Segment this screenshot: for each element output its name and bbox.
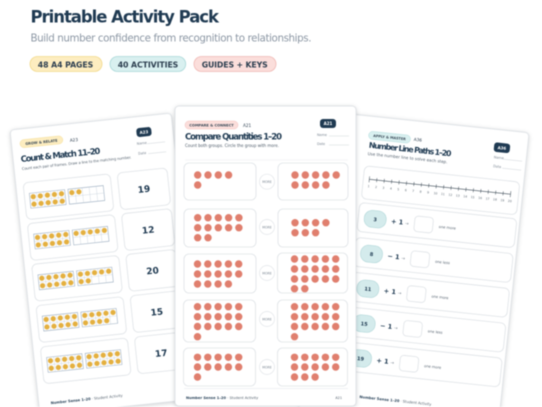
row 3: 14 vs 17 <box>184 253 348 293</box>
step row: 3 plus 1: one more <box>439 225 457 231</box>
step row: 15 minus 1: 15 <box>360 321 368 328</box>
tag: compare and connect <box>185 121 238 129</box>
pill: activities: 40 ACTIVITIES <box>118 60 179 70</box>
worksheet title: Count & Match 11–20 <box>20 146 101 164</box>
date field: Date <box>317 142 325 146</box>
date field <box>138 149 166 156</box>
step row: 3 plus 1: 3 <box>373 217 378 223</box>
step row: 8 minus 1: one less <box>435 260 450 265</box>
number line <box>361 166 520 215</box>
row 5: 11 vs 13: MORE <box>262 365 272 369</box>
dark badge <box>136 127 152 137</box>
dark badge <box>320 119 336 128</box>
step row: 11 plus 1 <box>350 272 510 317</box>
number line: 1 <box>367 184 370 188</box>
row 4: nineteen: 15 <box>150 308 164 319</box>
footer: Number Sense 1–20 · Student Activity <box>186 396 259 400</box>
step row: 11 plus 1: one more <box>431 294 449 300</box>
row 5: twenty: 17 <box>155 349 168 360</box>
number line: 8 <box>419 190 422 194</box>
step row: 15 minus 1: → <box>394 326 398 332</box>
number line: 15 <box>471 195 475 199</box>
code: A23 <box>70 137 79 143</box>
subtitle: Build number confidence from recognition to relationships. <box>30 33 312 45</box>
step row: 19 plus 1: → <box>390 361 394 366</box>
row 2: 12 vs 7: MORE <box>262 225 272 229</box>
step row: 3 plus 1: → <box>405 222 409 227</box>
number line: 17 <box>485 197 490 201</box>
row 3: seventeen: 20 <box>146 266 159 277</box>
step row: 15 minus 1 <box>346 307 506 352</box>
instruction: Count both groups. Circle the group with more. <box>185 143 279 148</box>
row 3: 14 vs 17: MORE <box>262 271 272 275</box>
number line: 7 <box>412 189 414 193</box>
step row: 8 minus 1: 8 <box>369 252 374 258</box>
row 5: twenty <box>40 332 188 384</box>
tag: apply and master: APPLY & MASTER <box>373 134 406 141</box>
step row: 19 plus 1: + 1 <box>376 357 389 366</box>
number line: 5 <box>397 187 400 192</box>
pill: pages: 48 A4 PAGES <box>38 60 94 70</box>
dark badge: A36 <box>497 145 507 151</box>
tag: apply and master <box>368 131 411 143</box>
number line: 18 <box>493 197 497 202</box>
number line: 12 <box>448 193 453 197</box>
pill: activities <box>110 56 186 72</box>
dark badge: A23 <box>139 129 149 135</box>
step row: 11 plus 1: 11 <box>364 286 372 293</box>
date field <box>493 164 521 171</box>
name field <box>317 133 349 137</box>
footer: A21 <box>335 396 342 400</box>
name field: Name <box>494 155 504 160</box>
footer <box>186 396 342 400</box>
number line: 3 <box>382 186 385 190</box>
dark badge <box>493 142 510 153</box>
row 1: twelve: 19 <box>137 185 151 196</box>
pill: guides <box>194 56 276 72</box>
pill: pages <box>30 56 102 72</box>
panel: centre worksheet Compare Quantities <box>175 106 356 406</box>
step row: 19 plus 1 <box>342 342 502 387</box>
footer: Number Sense 1–20 · Student Activity <box>359 395 432 407</box>
step row: 3 plus 1: + 1 <box>391 217 404 227</box>
step row: 11 plus 1: → <box>397 291 402 297</box>
row 4: nineteen <box>36 291 184 343</box>
instruction: Use the number line to solve each step. <box>368 151 448 164</box>
number line: 4 <box>390 187 392 191</box>
name field: Name <box>137 141 147 146</box>
row 5: 11 vs 13 <box>184 348 348 386</box>
row 1: 5 vs 9 <box>184 163 348 200</box>
tag: grow and relate <box>20 136 63 148</box>
number line: 16 <box>478 196 482 200</box>
tag: compare and connect: COMPARE & CONNECT <box>189 124 234 128</box>
code: A21 <box>243 123 252 128</box>
row 2: fifteen <box>27 209 175 261</box>
date field: Date <box>493 164 501 169</box>
tag: grow and relate: GROW & RELATE <box>25 139 58 146</box>
step row: 11 plus 1: + 1 <box>383 287 397 296</box>
row 4: 16 vs 16 <box>184 300 348 342</box>
number line: 19 <box>500 198 505 203</box>
row 1: 5 vs 9: MORE <box>262 180 272 184</box>
step row: 19 plus 1: 19 <box>357 356 365 363</box>
date field <box>317 142 349 146</box>
number line: 11 <box>441 192 445 196</box>
number line: 14 <box>463 194 467 199</box>
row 4: 16 vs 16: MORE <box>262 317 272 321</box>
step row: 3 plus 1 <box>357 202 517 248</box>
worksheet title: Compare Quantities 1–20 <box>185 132 282 142</box>
number line: 10 <box>433 191 438 196</box>
step row: 8 minus 1: − 1 <box>387 252 400 261</box>
row 2: 12 vs 7 <box>184 209 348 247</box>
step row: 8 minus 1: → <box>401 257 405 262</box>
number line: 9 <box>427 190 429 195</box>
number line: 6 <box>405 188 407 192</box>
number line: 13 <box>456 193 460 198</box>
worksheet title: Number Line Paths 1–20 <box>368 141 452 158</box>
number line: 20 <box>508 199 512 203</box>
title: Printable Activity Pack <box>30 8 220 27</box>
date field: Date <box>138 151 146 156</box>
row 2: fifteen: 12 <box>142 225 155 237</box>
number line: 2 <box>375 185 377 189</box>
pill: guides: GUIDES + KEYS <box>202 60 268 70</box>
step row: 19 plus 1: one more <box>424 364 442 370</box>
panel: right worksheet Number Line Paths <box>298 112 529 407</box>
dark badge: A21 <box>324 121 333 126</box>
step row: 8 minus 1 <box>353 237 513 283</box>
code: A36 <box>413 137 423 143</box>
name field <box>137 139 165 146</box>
name field: Name <box>317 133 327 137</box>
name field <box>494 155 522 162</box>
step row: 15 minus 1: − 1 <box>380 322 393 331</box>
row 1: twelve <box>23 168 171 220</box>
footer: Number Sense 1–20 · Student Activity <box>51 394 124 405</box>
instruction: Count each pair of frames. Draw a line to the matching number. <box>22 155 132 171</box>
row 3: seventeen <box>32 249 179 301</box>
panel: left worksheet Count and Match <box>10 113 201 407</box>
step row: 15 minus 1: one less <box>428 329 443 335</box>
stat pills <box>30 56 276 72</box>
